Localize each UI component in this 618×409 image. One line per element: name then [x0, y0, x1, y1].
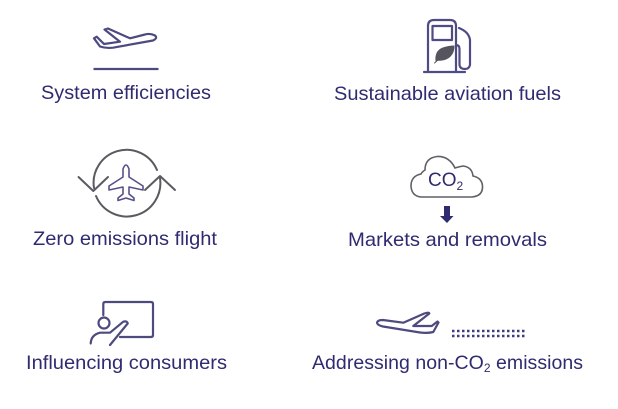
heading: addressing non-CO2 emissions: Addressing non-CO — [312, 352, 484, 374]
icon: cycle arrows around plane — [78, 150, 175, 217]
heading: zero emissions flight: Zero emissions flight — [33, 228, 218, 250]
down arrow — [440, 206, 454, 223]
heading: influencing consumers: Influencing consumers — [26, 352, 227, 374]
icon: CO2 cloud with down arrow — [411, 156, 483, 223]
heading: markets and removals: Markets and removals — [348, 229, 547, 251]
icon: plane with contrail — [377, 313, 525, 336]
icon: plane taking off — [94, 28, 158, 69]
CO2 label: CO — [428, 170, 456, 191]
heading: addressing non-CO2 emissions: 2 — [484, 361, 491, 375]
contrail dots — [452, 331, 525, 336]
heading: system efficiencies: System efficiencies — [41, 82, 211, 104]
heading: sustainable aviation fuels: Sustainable aviation fuels — [334, 83, 561, 105]
icon: presenter at board — [91, 302, 153, 345]
icon: fuel pump with leaf — [424, 20, 470, 72]
CO2 label: 2 — [456, 179, 464, 193]
heading: addressing non-CO2 emissions: emissions — [491, 352, 583, 374]
